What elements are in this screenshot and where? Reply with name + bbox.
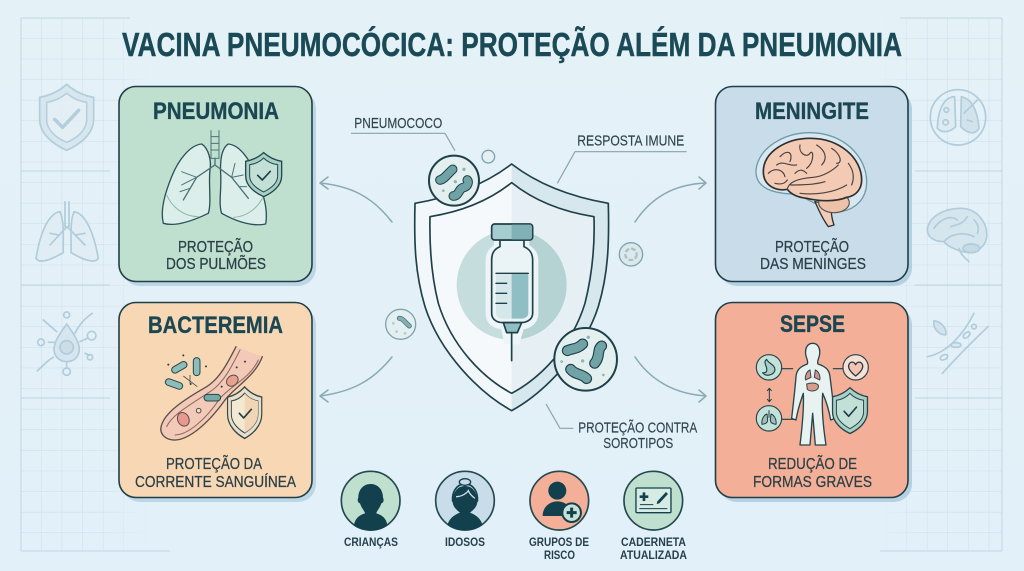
icon: brain [756,133,867,227]
heading: pneumonia: PNEUMONIA [153,98,279,125]
caption: corrente sanguinea: CORRENTE SANGUÍNEA [135,472,296,491]
callout: protecao contra sorotipos: PROTEÇÃO CONTRA [578,419,698,436]
caption: corrente sanguinea [135,453,296,491]
background icon: shield [40,84,94,150]
label: IDOSOS [445,535,485,549]
caption: meninges: PROTEÇÃO [775,236,849,256]
heading: meningite: MENINGITE [755,98,869,125]
callout: pneumococo [351,116,455,151]
heading: sepse: SEPSE [780,311,845,338]
small circle: top [482,150,495,163]
icon: elderly person [436,471,494,531]
panel: meningite [716,86,912,286]
panel: bacteremia [119,302,316,502]
arrow: vaccine to bacteremia [320,357,392,402]
icon: child [341,471,400,531]
callout: pneumococo: PNEUMOCOCO [354,116,442,132]
icon: body with organs and shield [756,343,868,445]
label: ATUALIZADA [620,548,687,562]
small bacteria circle: left [386,309,416,339]
audience: criancas [341,471,400,549]
vaccine vial [457,224,567,361]
label: CADERNETA [621,535,686,549]
caption: formas graves: REDUÇÃO DE [768,453,857,473]
central shield with vaccine [351,116,698,452]
audience: idosos [436,471,494,549]
background icon: droplet [37,312,96,375]
caption: pulmoes: DOS PULMÕES [166,253,266,273]
callout: protecao contra sorotipos [546,404,698,452]
panel: sepse [716,302,912,502]
callout: resposta imune [557,133,687,183]
shield [415,164,609,411]
small bacteria circle: right [619,243,643,266]
callout: resposta imune: RESPOSTA IMUNE [577,133,685,149]
label: RISCO [544,548,575,562]
audience: caderneta atualizada [620,471,687,562]
callout: protecao contra sorotipos: SOROTIPOS [603,436,673,452]
caption: formas graves [753,453,872,491]
caption: corrente sanguinea: PROTEÇÃO DA [166,453,262,473]
caption: formas graves: FORMAS GRAVES [753,474,872,491]
caption: meninges [760,236,866,273]
label: CRIANÇAS [344,535,398,549]
arrow: vaccine to pneumonia [320,177,392,222]
bacteria circle: bottom [554,328,617,391]
background icon: brain [927,208,987,262]
icon: vaccination card [624,471,683,530]
label [620,535,687,562]
caption: pulmoes: PROTEÇÃO [178,236,253,256]
panel: pneumonia [119,86,316,286]
caption: pulmoes [166,236,266,273]
heading: bacteremia: BACTEREMIA [148,312,283,339]
label [529,535,589,562]
audience: grupos de risco [529,471,589,562]
icon: person with plus [530,471,589,530]
icon: blood vessel with bacteria and shield [161,347,262,440]
caption: meninges: DAS MENINGES [760,256,866,273]
arrow: vaccine to meningitis [635,177,706,222]
icon: lungs with shield [162,131,282,225]
background icon: vessel [927,313,988,373]
background icon: lungs in circle [930,90,986,145]
bacteria circle: top [429,156,479,206]
arrow: vaccine to sepsis [635,357,706,402]
background icon: lungs [36,202,98,261]
label: GRUPOS DE [529,535,589,549]
